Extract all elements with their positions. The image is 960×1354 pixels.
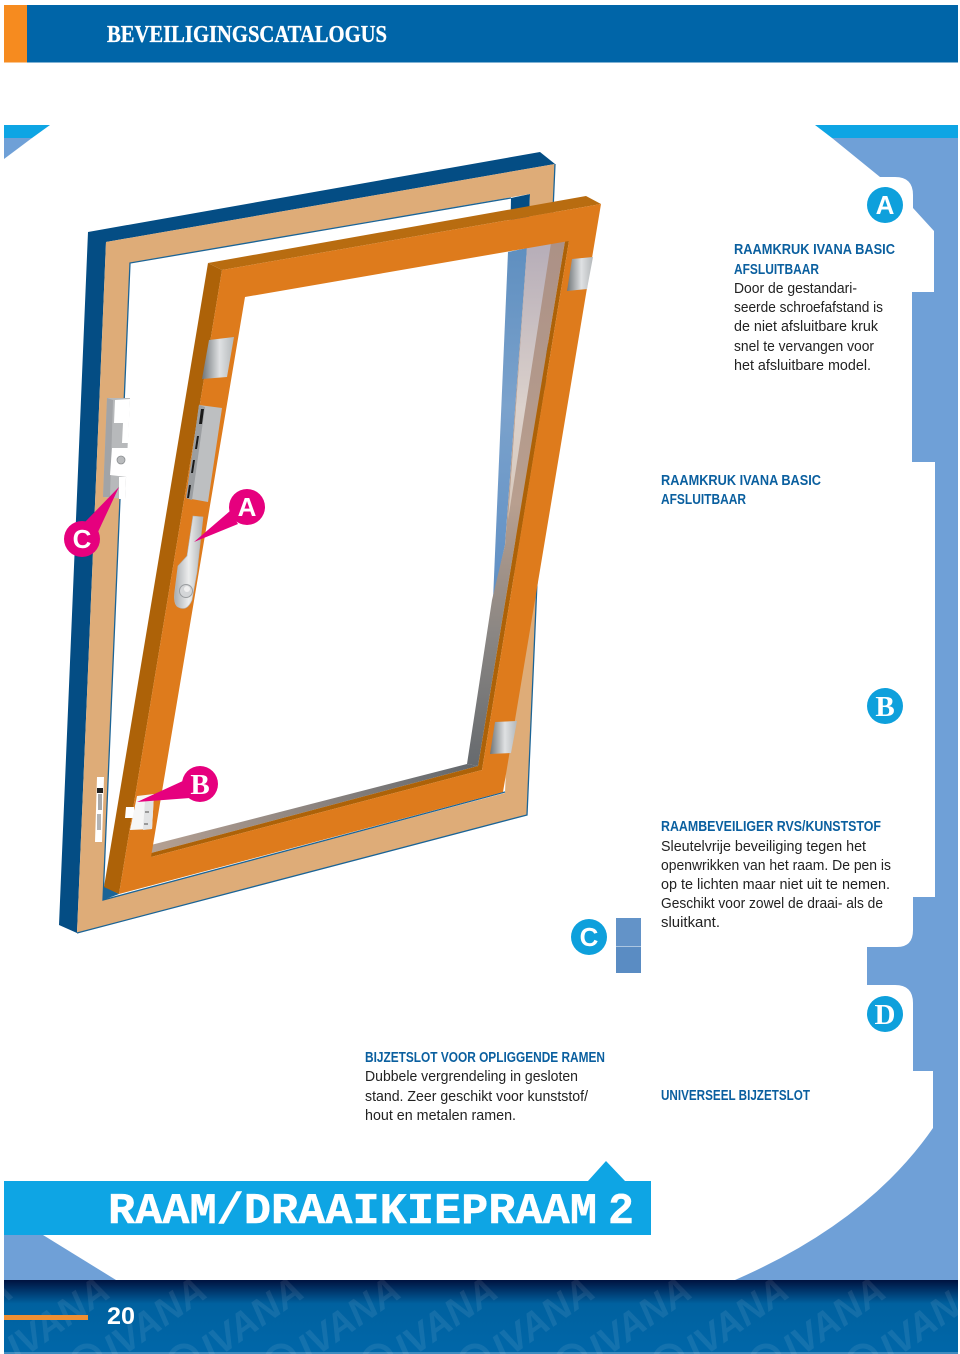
glass reflection	[493, 248, 527, 600]
callout: B on guard	[137, 766, 218, 802]
text block: raamkruk basic A: AFSLUITBAAR	[734, 262, 819, 278]
footer orange bar	[4, 1315, 88, 1320]
text block: bijzetslot: BIJZETSLOT VOOR OPLIGGENDE RAMEN	[365, 1050, 605, 1066]
page number: 20	[107, 1303, 135, 1330]
section title text: RAAM/DRAAIKIEPRAAM	[108, 1187, 597, 1237]
badge D: D	[875, 999, 895, 1031]
badge C	[571, 919, 607, 955]
text block: raamkruk basic A: snel te vervangen voor	[734, 339, 874, 355]
bottom reveal	[151, 764, 478, 853]
text block: raamkruk basic A: RAAMKRUK IVANA BASIC	[734, 242, 895, 258]
section title banner	[4, 1161, 651, 1237]
text block: raamkruk basic A: het afsluitbare model.	[734, 358, 871, 374]
header orange tab	[4, 5, 27, 62]
text block: raambeveiliger: op te lichten maar niet uit te nemen.	[661, 877, 890, 893]
text block: raambeveiliger: RAAMBEVEILIGER RVS/KUNSTSTOF	[661, 819, 881, 835]
header title: BEVEILIGINGSCATALOGUS	[107, 22, 387, 48]
badge B: B	[875, 691, 895, 723]
footer band	[4, 1280, 958, 1354]
text block: raamkruk afsluitbaar: RAAMKRUK IVANA BASIC	[661, 473, 821, 489]
text block: raamkruk basic A: Door de gestandari-	[734, 281, 857, 297]
badge B	[867, 688, 903, 724]
top-left corner triangle	[4, 125, 50, 159]
sash left side	[104, 263, 222, 894]
frame lock C	[103, 398, 130, 499]
text block: bijzetslot	[365, 1050, 605, 1124]
callout: C on frame	[64, 487, 119, 557]
section title text: 2	[608, 1187, 634, 1237]
text block: raamkruk basic A	[734, 242, 895, 374]
hinge top right	[567, 257, 593, 291]
reveal light highlight	[508, 243, 551, 520]
window handle	[174, 516, 203, 608]
product placeholder C	[616, 918, 641, 973]
outer frame side	[59, 152, 555, 933]
callout: A on handle: A	[238, 492, 257, 522]
text block: raambeveiliger: Sleutelvrije beveiliging tegen het	[661, 839, 866, 855]
badge A	[867, 187, 903, 223]
sash inner shadow strip	[151, 241, 569, 857]
badge A: A	[876, 190, 895, 220]
page header band	[4, 5, 958, 62]
lock plate on sash	[186, 405, 222, 502]
text block: bijzetslot: stand. Zeer geschikt voor kunststof/	[365, 1089, 589, 1105]
text block: bijzetslot: Dubbele vergrendeling in gesloten	[365, 1069, 578, 1085]
callout: B on guard: B	[190, 769, 210, 801]
text block: raambeveiliger: Geschikt voor zowel de draai- als de	[661, 896, 883, 912]
text block: raamkruk basic A: seerde schroefafstand is	[734, 300, 883, 316]
text block: raamkruk afsluitbaar	[661, 473, 821, 508]
hinge left	[202, 337, 234, 379]
text block: universeel bijzetslot: UNIVERSEEL BIJZETSLOT	[661, 1088, 810, 1104]
footer watermark	[4, 1280, 958, 1354]
text block: raambeveiliger: openwrikken van het raam. De pen is	[661, 858, 891, 874]
callout: A on handle	[194, 489, 265, 542]
frame inner wall	[510, 194, 530, 245]
hinge bottom right	[490, 721, 517, 754]
badge C: C	[580, 922, 599, 952]
cyan top bar	[815, 125, 958, 138]
sash face	[119, 204, 601, 894]
callout: C on frame: C	[73, 524, 92, 554]
side reveal	[467, 241, 565, 766]
text block: raamkruk afsluitbaar: AFSLUITBAAR	[661, 492, 746, 508]
outer frame face	[77, 164, 555, 933]
right blue background panel	[735, 125, 958, 1280]
sash top side	[208, 196, 601, 270]
window guard B	[125, 794, 154, 830]
window illustration	[59, 152, 601, 933]
frame strike plate	[95, 777, 104, 842]
bottom-left blue wedge	[4, 1235, 116, 1280]
text block: raamkruk basic A: de niet afsluitbare kruk	[734, 319, 879, 335]
text block: raambeveiliger	[661, 819, 891, 931]
badge D	[867, 996, 903, 1032]
frame edge lines	[77, 164, 555, 933]
text block: bijzetslot: hout en metalen ramen.	[365, 1108, 516, 1124]
text block: raambeveiliger: sluitkant.	[661, 915, 720, 931]
